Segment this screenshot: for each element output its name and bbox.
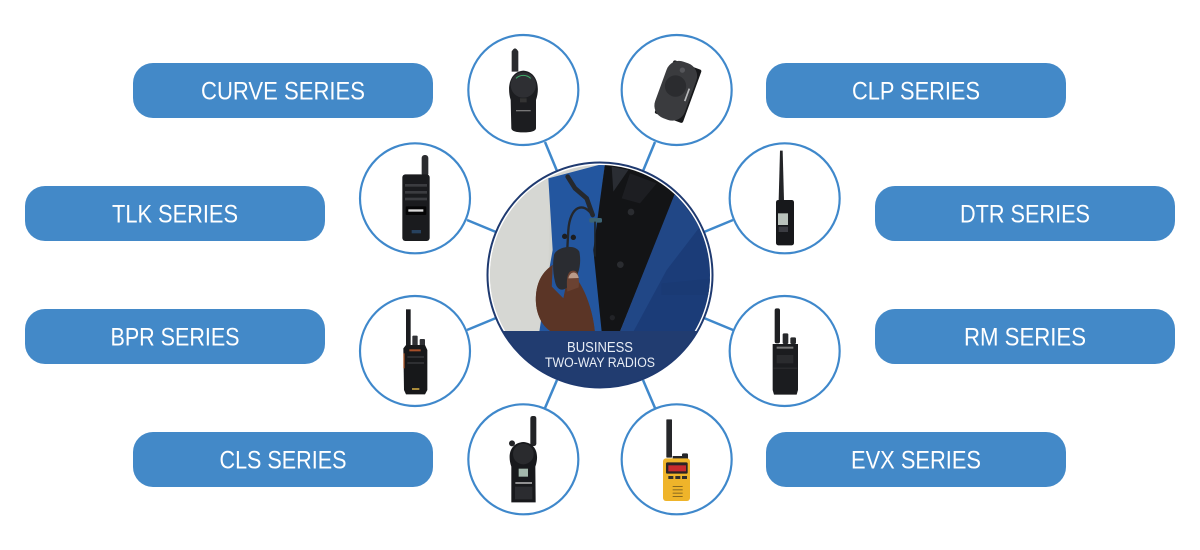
label: DTR SERIES: DTR SERIES: [960, 200, 1090, 228]
label: DTR SERIES: [875, 186, 1175, 241]
label: TLK SERIES: TLK SERIES: [112, 200, 238, 228]
caption banner: TWO-WAY RADIOS: [545, 355, 655, 370]
label: CLP SERIES: CLP SERIES: [852, 78, 980, 106]
icon circle: RM radio: [730, 296, 840, 406]
label: TLK SERIES: [25, 186, 325, 241]
connector lines: [467, 142, 733, 408]
label: CURVE SERIES: CURVE SERIES: [201, 78, 365, 106]
radio in hand: [553, 247, 580, 290]
icon circle: TLK radio: [360, 143, 470, 253]
central hub: photo and caption: [486, 162, 714, 388]
label: RM SERIES: [875, 309, 1175, 364]
label: CURVE SERIES: [133, 63, 433, 118]
hub outer ring: [488, 162, 712, 388]
label: CLS SERIES: CLS SERIES: [220, 446, 346, 474]
icon circle: EVX radio: [622, 404, 732, 514]
radio earpiece cable: [567, 207, 593, 248]
label: CLS SERIES: [133, 432, 433, 487]
caption banner: [504, 331, 696, 386]
caption banner: BUSINESS: [567, 340, 633, 356]
label: BPR SERIES: BPR SERIES: [110, 324, 240, 352]
icon circle: CLP radio: [622, 35, 732, 145]
icon circle: BPR radio: [360, 296, 470, 406]
photo: man in blue jacket holding radio: [490, 165, 710, 331]
icon circle: CLS radio: [468, 404, 578, 514]
label: EVX SERIES: [766, 432, 1066, 487]
hand: [536, 265, 595, 333]
icon circle: DTR radio: [730, 143, 840, 253]
icon circle: Curve radio: [468, 35, 578, 145]
label: BPR SERIES: [25, 309, 325, 364]
label: CLP SERIES: [766, 63, 1066, 118]
label: EVX SERIES: EVX SERIES: [851, 446, 981, 474]
label: RM SERIES: RM SERIES: [964, 324, 1086, 352]
